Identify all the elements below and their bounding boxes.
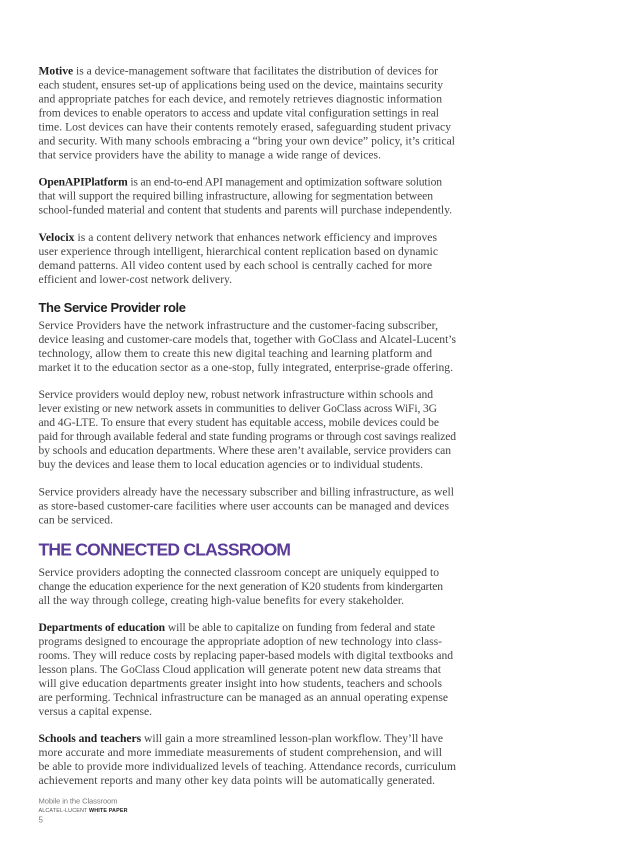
paragraph: Service Provider deployment: Service providers would deploy new, robust network infrastructure within schools and	[38, 388, 433, 401]
paragraph: Service Provider deployment	[38, 388, 456, 471]
paragraph: Motive: that service providers have the ability to manage a wide range of devices.	[38, 148, 381, 162]
paragraph: Departments of education: will give education departments greater insight into how students, teachers and schools	[38, 677, 442, 690]
paragraph: Service Provider intro	[38, 319, 456, 374]
paragraph: Departments of education: lesson plans. The GoClass Cloud application will generate potent new data streams that	[38, 663, 442, 676]
paragraph: Motive: each student, ensures set-up of applications being used on the device, maintains security	[38, 78, 443, 92]
paragraph: Connected classroom intro: change the education experience for the next generation of K20 students from kindergarten	[38, 580, 443, 593]
paragraph: Service Provider deployment: paid for through available federal and state funding programs or through cost savings realized	[38, 430, 456, 443]
paragraph: Velocix: efficient and lower-cost network delivery.	[38, 273, 232, 286]
footer	[38, 796, 128, 824]
paragraph: Service Provider deployment: buy the devices and lease them to local education agencies or to individual students.	[38, 458, 423, 471]
paragraph: Motive: from devices to enable operators to access and update vital configuration settings in real	[38, 106, 439, 120]
paragraph: Departments of education: are performing. Technical infrastructure can be managed as an annual operating expense	[38, 691, 448, 704]
paragraph: Schools and teachers: be able to provide more individualized levels of teaching. Attendance records, curriculum	[38, 760, 456, 773]
paragraph: Service Provider intro: device leasing and customer-care models that, together with GoClass and Alcatel-Lucent’s	[38, 333, 456, 346]
paragraph: Service Provider intro: technology, allow them to create this new digital teaching and learning platform and	[38, 347, 432, 360]
paragraph: Velocix	[38, 231, 438, 286]
paragraph: Motive: time. Lost devices can have their contents remotely erased, safeguarding student privacy	[38, 120, 451, 134]
paragraph: Service Provider infrastructure: can be serviced.	[38, 514, 113, 526]
footer: page number: 5	[38, 816, 44, 824]
paragraph: Service Provider infrastructure: as store-based customer-care facilities where user accounts can be managed and devices	[38, 500, 449, 512]
footer: publisher line: ALCATEL-LUCENT WHITE PAPER	[38, 808, 128, 814]
paragraph: Motive: Motive is a device-management software that facilitates the distribution of devices for	[38, 64, 438, 78]
paragraph: Velocix: Velocix is a content delivery network that enhances network efficiency and improves	[38, 231, 437, 244]
paragraph: OpenAPIPlatform: that will support the required billing infrastructure, allowing for segmentation between	[38, 190, 433, 202]
paragraph: Departments of education: versus a capital expense.	[38, 705, 152, 718]
paragraph: Connected classroom intro	[38, 566, 443, 607]
paragraph: Service Provider deployment: and 4G-LTE. To ensure that every student has equitable access, mobile devices could be	[38, 416, 439, 429]
paragraph: Velocix: user experience through intelligent, hierarchical content replication based on dynamic	[38, 245, 438, 258]
paragraph: Motive: and security. With many schools embracing a “bring your own device” policy, it’s critical	[38, 134, 455, 148]
paragraph: Motive: and appropriate patches for each device, and remotely retrieves diagnostic information	[38, 92, 442, 106]
paragraph: Departments of education: rooms. They will reduce costs by replacing paper-based models with digital textbooks and	[38, 649, 453, 662]
paragraph: Service Provider deployment: lever existing or new network assets in communities to deliver GoClass across WiFi, 3G	[38, 402, 438, 415]
paragraph: Service Provider deployment: by schools and education departments. Where these aren’t available, service providers can	[38, 444, 451, 457]
paragraph: Velocix: demand patterns. All video content used by each school is centrally cached for more	[38, 259, 432, 272]
paragraph: Departments of education	[38, 621, 453, 718]
paragraph: Service Provider intro: market it to the education sector as a one-stop, fully integrated, enterprise-grade offering.	[38, 361, 453, 374]
footer: document title: Mobile in the Classroom	[38, 796, 118, 806]
paragraph: Service Provider intro: Service Providers have the network infrastructure and the customer-facing subscriber,	[38, 319, 438, 332]
paragraph: OpenAPIPlatform: OpenAPIPlatform is an end-to-end API management and optimization software solution	[38, 176, 442, 188]
paragraph: Service Provider infrastructure	[38, 486, 454, 526]
paragraph: OpenAPIPlatform: school-funded material and content that students and parents will purchase independently.	[38, 204, 452, 216]
paragraph: OpenAPIPlatform	[38, 176, 452, 216]
paragraph: Schools and teachers: Schools and teachers will gain a more streamlined lesson-plan workflow. They’ll have	[38, 732, 443, 745]
heading: The Service Provider role: The Service Provider role	[38, 300, 186, 315]
paragraph: Service Provider infrastructure: Service providers already have the necessary subscriber and billing infrastructure, as well	[38, 486, 454, 498]
heading: The Connected Classroom: THE CONNECTED CLASSROOM	[38, 540, 291, 560]
paragraph: Departments of education: programs designed to encourage the appropriate adoption of new technology into class-	[38, 635, 442, 648]
paragraph: Schools and teachers: achievement reports and many other key data points will be automatically generated.	[38, 774, 435, 787]
paragraph: Schools and teachers	[38, 732, 456, 787]
paragraph: Connected classroom intro: Service providers adopting the connected classroom concept are uniquely equipped to	[38, 566, 439, 579]
paragraph: Connected classroom intro: all the way through college, creating high-value benefits for every stakeholder.	[38, 594, 404, 607]
paragraph: Departments of education: Departments of education will be able to capitalize on funding from federal and state	[38, 621, 435, 634]
paragraph: Motive	[38, 64, 455, 162]
paragraph: Schools and teachers: more accurate and more immediate measurements of student comprehension, and will	[38, 746, 442, 759]
